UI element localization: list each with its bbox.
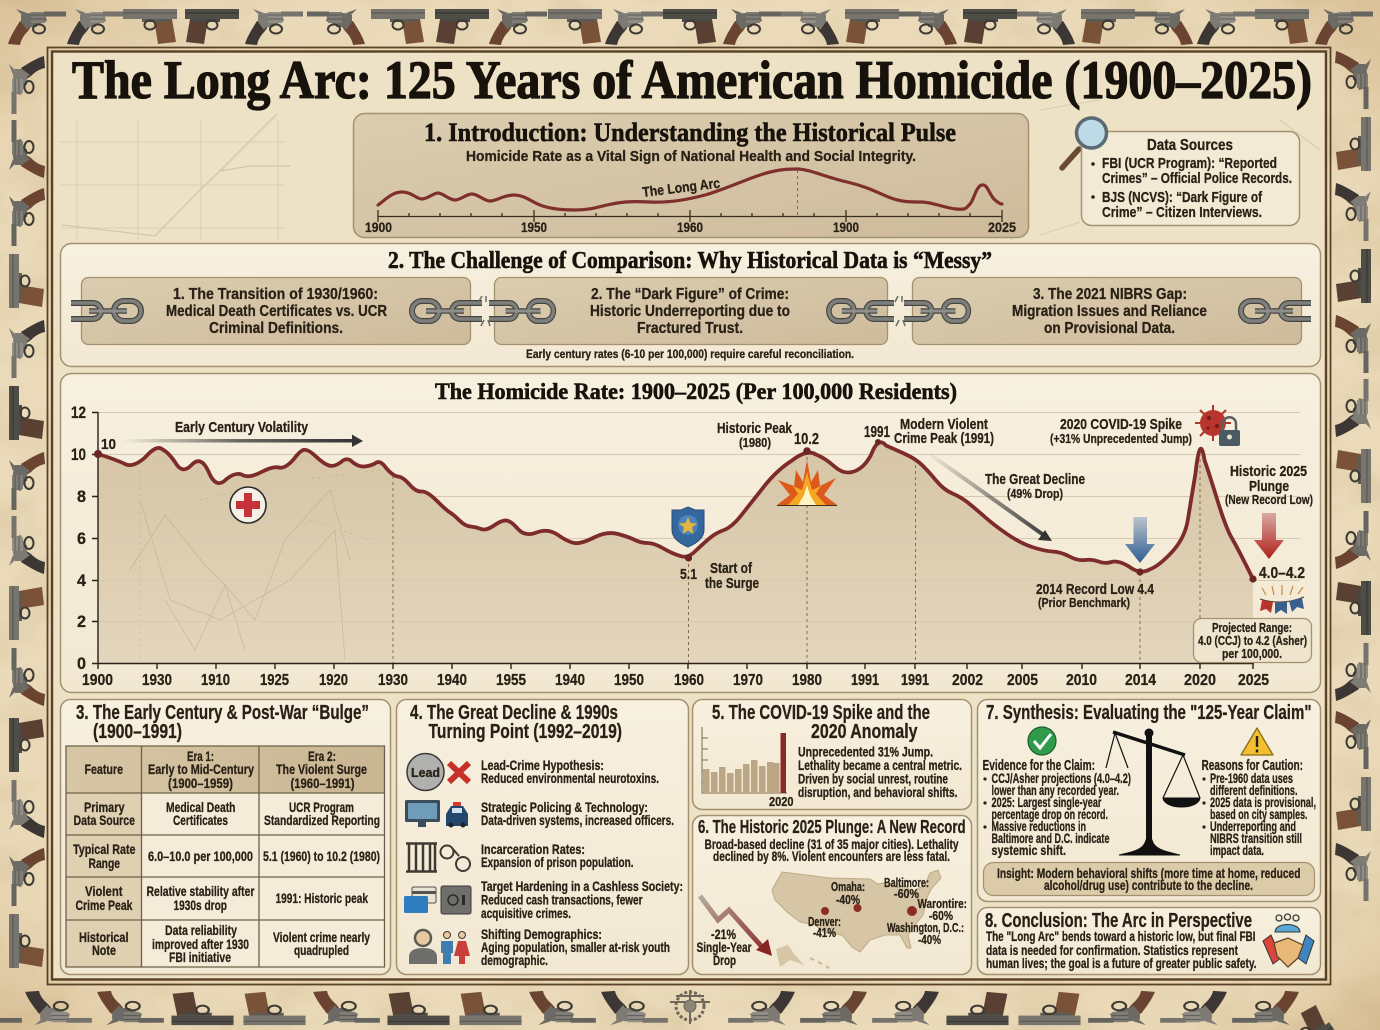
comparison table: Certificates	[173, 812, 228, 828]
callout: projected range: Projected Range:	[1212, 621, 1292, 635]
covid description: Lethality became a central metric.	[798, 757, 962, 773]
annotation: historic peak: 10.2	[794, 431, 819, 448]
covid description: disruption, and behavioral shifts.	[798, 784, 958, 800]
mini long arc chart: 1900	[365, 219, 392, 235]
comparison table: Era 1:	[187, 748, 214, 764]
chart: x-axis labels: 1910	[201, 672, 230, 689]
chart: x-axis labels: 1991	[851, 672, 879, 689]
insight callout: alcohol/drug use) contribute to the decline.	[1044, 877, 1253, 893]
chart: faint sketch texture	[130, 470, 380, 660]
chart: x-axis labels: 2005	[1007, 672, 1038, 689]
challenge footnote: Early century rates (6-10 per 100,000) require careful reconciliation.	[526, 347, 854, 361]
left gun border	[9, 56, 45, 968]
comparison table: Note	[92, 942, 116, 958]
challenge card 3: on Provisional Data.	[1044, 320, 1175, 337]
heading: section 4: 4. The Great Decline & 1990s	[410, 702, 618, 724]
chart: data point markers	[94, 439, 1257, 583]
icon: warning triangle	[1241, 728, 1273, 755]
conclusion text: human lives; the goal is a future of greater public safety.	[986, 955, 1256, 971]
mini long arc chart: The Long Arc	[641, 175, 721, 200]
comparison table: FBI initiative	[169, 949, 231, 965]
annotation: historic peak: (1980)	[739, 435, 771, 450]
faint background sketch chart	[60, 100, 1320, 240]
annotation: 2025 plunge: Plunge	[1249, 478, 1289, 495]
comparison table: UCR Program	[289, 799, 354, 815]
challenge card 2: 2. The “Dark Figure” of Crime:	[591, 286, 789, 303]
annotation: covid spike	[1050, 416, 1192, 446]
item: shifting demographics: Aging population, smaller at-risk youth	[481, 940, 670, 955]
chart: x-axis labels: 2025	[1238, 672, 1269, 689]
city labels: Omaha:	[831, 879, 865, 894]
reasons for caution: 2025 data is provisional,	[1210, 795, 1316, 810]
icon: virus and lock	[1195, 405, 1240, 446]
evidence for the claim: Evidence for the Claim:	[982, 758, 1095, 774]
challenge card 3: 3. The 2021 NIBRS Gap:	[1033, 286, 1187, 303]
item: target hardening	[481, 879, 683, 921]
plunge description: declined by 8%. Violent encounters are less fatal.	[713, 849, 950, 864]
item: strategic policing	[481, 800, 674, 828]
panel: synthesis	[978, 700, 1320, 902]
challenge card 2: Historic Underreporting due to	[590, 303, 790, 320]
challenge card 3	[912, 278, 1302, 344]
bar chart: covid spike: 2020	[769, 795, 794, 809]
annotation: 1960 low	[680, 560, 759, 592]
bottom emblem	[670, 990, 710, 1024]
chart: x-axis labels: 1930	[378, 672, 408, 689]
icon: jail and handcuffs	[406, 844, 470, 872]
panel: challenge of comparison	[60, 244, 1320, 366]
chart: x-axis labels	[82, 672, 1269, 689]
chart: x-axis labels: 2014	[1125, 672, 1156, 689]
panel: conclusion	[978, 908, 1320, 974]
comparison table: 1930s drop	[174, 897, 227, 913]
city labels: Denver:	[808, 914, 841, 929]
reasons for caution	[1202, 758, 1316, 858]
annotation: covid spike: (+31% Unprecedented Jump)	[1050, 431, 1192, 446]
reasons for caution: different definitions.	[1210, 783, 1298, 798]
chart: x-axis labels: 1980	[792, 672, 822, 689]
heading: section 5: 2020 Anomaly	[811, 721, 918, 743]
annotation: modern violent crime peak: Crime Peak (1991)	[894, 430, 994, 447]
comparison table: Data reliability	[165, 922, 237, 938]
chart: y-axis labels: 6	[77, 529, 86, 548]
annotation: early century volatility: Early Century Volatility	[175, 419, 309, 436]
annotation: covid spike: 2020 COVID-19 Spike	[1060, 416, 1182, 433]
icon: lead and red x: Lead	[411, 765, 440, 780]
heading: section 5	[712, 702, 930, 743]
callout: projected range	[1194, 618, 1312, 662]
chart: homicide rate line	[98, 442, 1253, 579]
reasons for caution: Reasons for Caution:	[1202, 758, 1303, 774]
evidence for the claim: percentage drop on record.	[992, 807, 1108, 822]
challenge card 1	[82, 278, 470, 344]
comparison table: Range	[88, 855, 120, 871]
comparison table: Early to Mid-Century	[148, 761, 254, 777]
annotation: 2025 plunge: (New Record Low)	[1225, 492, 1313, 507]
chart: axes	[92, 412, 1254, 669]
panel: early century and post-war bulge	[60, 700, 390, 974]
comparison table: Violent	[85, 883, 123, 899]
reasons for caution: NIBRS transition still	[1210, 831, 1302, 846]
chart: y-axis labels	[71, 403, 87, 673]
chart: x-axis labels: 1920	[319, 672, 348, 689]
arrow: single-year drop: -21%	[711, 926, 736, 942]
annotation: modern violent crime peak: Modern Violent	[900, 416, 988, 433]
item: incarceration: Incarceration Rates:	[481, 842, 585, 857]
comparison table: 6.0–10.0 per 100,000	[148, 848, 253, 864]
city labels: -60%	[894, 886, 919, 901]
icon: celebration banners	[1260, 585, 1304, 614]
arrow: red plunge	[1254, 513, 1284, 559]
challenge card 1: Criminal Definitions.	[209, 320, 343, 337]
covid description: Driven by social unrest, routine	[798, 770, 948, 786]
item: shifting demographics	[481, 927, 670, 968]
item: incarceration	[481, 842, 634, 870]
chart: x-axis labels: 1940	[555, 672, 585, 689]
reasons for caution: impact data.	[1210, 843, 1264, 858]
chart: y-axis labels: 10	[71, 445, 86, 464]
chart: y-axis labels: 0	[77, 654, 86, 673]
icon: police badge	[672, 507, 704, 547]
icon: lead and red x	[407, 754, 469, 790]
chart: grid lines	[98, 412, 1300, 622]
reasons for caution: Underreporting and	[1210, 819, 1296, 834]
chart: x-axis labels: 1991	[901, 672, 929, 689]
comparison table: Feature	[84, 761, 123, 777]
chart: reference dashes	[393, 447, 1200, 663]
chart: y-axis labels: 4	[77, 571, 87, 590]
icon: credit cards and safe	[404, 886, 471, 914]
data sources list: FBI (UCR Program): “Reported	[1102, 155, 1277, 172]
heading: section 4	[410, 702, 622, 743]
challenge card 1: 1. The Transition of 1930/1960:	[173, 286, 378, 303]
annotation: modern violent crime peak	[864, 416, 994, 447]
arrow: great decline: The Great Decline	[985, 471, 1085, 488]
data sources list	[1091, 155, 1292, 221]
icon: explosion	[777, 460, 837, 506]
item: target hardening: Reduced cash transactions, fewer	[481, 892, 643, 908]
comparison table: (1960–1991)	[290, 775, 354, 791]
map of united states	[772, 870, 967, 968]
comparison table: Crime Peak	[76, 897, 133, 913]
heading: section 3: (1900–1991)	[93, 721, 182, 743]
annotation: early century volatility	[122, 419, 363, 447]
comparison table: Standardized Reporting	[264, 812, 380, 828]
data sources list: BJS (NCVS): “Dark Figure of	[1102, 189, 1263, 206]
annotation: projected value: 4.0–4.2	[1259, 565, 1305, 582]
icon: magnifying glass handle	[1062, 149, 1079, 168]
bar chart: covid spike	[702, 727, 794, 809]
comparison table: Typical Rate	[73, 841, 136, 857]
mini long arc chart	[365, 169, 1016, 235]
panel: covid spike	[692, 700, 972, 810]
city labels: -41%	[813, 925, 836, 940]
evidence for the claim: Massive reductions in	[992, 819, 1086, 834]
reasons for caution: Pre-1960 data uses	[1210, 771, 1293, 786]
heading: section 3	[76, 702, 369, 743]
comparison table: 1991: Historic peak	[276, 890, 368, 906]
evidence for the claim: systemic shift.	[992, 843, 1066, 858]
heading: section 8: 8. Conclusion: The Arc in Perspective	[985, 910, 1252, 932]
chart: y-axis labels: 12	[71, 403, 86, 422]
annotation: 2014 record low	[1036, 581, 1155, 610]
annotation: 1960 low: the Surge	[705, 575, 759, 592]
annotation: historic peak: Historic Peak	[717, 420, 793, 437]
annotation: 1960 low: 5.1	[680, 566, 697, 583]
arrow: great decline: (49% Drop)	[1007, 486, 1063, 501]
chart: area	[98, 442, 1253, 663]
annotation: modern violent crime peak: 1991	[864, 424, 890, 441]
annotation: 2025 plunge	[1225, 463, 1313, 507]
comparison table: Primary	[84, 799, 125, 815]
annotation: start value: 10	[101, 436, 116, 453]
chart title: The Homicide Rate: 1900–2025 (Per 100,000 Residents)	[435, 379, 957, 404]
comparison table: The Violent Surge	[276, 761, 367, 777]
heading: challenge: 2. The Challenge of Comparison: Why Historical Data is “Messy”	[388, 248, 992, 274]
city labels	[808, 875, 967, 947]
chart: x-axis labels: 2002	[952, 672, 983, 689]
comparison table: (1900–1959)	[168, 775, 233, 791]
icon: computer and police car	[405, 800, 468, 828]
conclusion text	[986, 928, 1256, 971]
top gun border	[8, 9, 1373, 45]
comparison table: improved after 1930	[152, 936, 249, 952]
annotation: 2014 record low: 2014 Record Low 4.4	[1036, 581, 1155, 598]
evidence for the claim: CCJ/Asher projections (4.0–4.2)	[992, 771, 1131, 786]
heading: section 3: 3. The Early Century & Post-War “Bulge”	[76, 702, 369, 724]
annotation: 1960 low: Start of	[710, 560, 753, 577]
covid description	[798, 744, 962, 800]
icon: chain links	[71, 296, 1311, 326]
comparison table: Data Source	[74, 812, 135, 828]
chart: x-axis labels: 1955	[496, 672, 526, 689]
panel: introduction	[354, 114, 1028, 238]
mini long arc chart: 1960	[677, 219, 703, 235]
conclusion text: The "Long Arc" bends toward a historic low, but final FBI	[986, 928, 1256, 944]
city labels: -60%	[929, 908, 953, 923]
annotation: 2014 record low: (Prior Benchmark)	[1038, 595, 1130, 610]
item: target hardening: acquisitive crimes.	[481, 906, 571, 921]
chart: x-axis labels: 2010	[1066, 672, 1097, 689]
arrow: single-year drop	[696, 896, 772, 968]
chart: x-axis labels: 1925	[260, 672, 289, 689]
panel: 2025 plunge	[692, 816, 972, 974]
comparison table: Relative stability after	[146, 883, 255, 899]
chart: x-axis labels: 1970	[733, 672, 763, 689]
bottom gun border	[0, 991, 1335, 1030]
chart: x-axis labels: 1960	[674, 672, 704, 689]
conclusion text: data is needed for confirmation. Statistics represent	[986, 942, 1238, 958]
arrow: single-year drop: Single-Year	[696, 939, 752, 955]
challenge card 1: Medical Death Certificates vs. UCR	[166, 303, 387, 320]
city labels: Baltimore:	[884, 875, 929, 890]
challenge card 3: Migration Issues and Reliance	[1012, 303, 1207, 320]
callout: projected range: per 100,000.	[1222, 647, 1282, 661]
covid description: Unprecedented 31% Jump.	[798, 744, 933, 760]
arrow: great decline	[931, 455, 1085, 541]
icon: balance scale	[1106, 729, 1200, 855]
reasons for caution: based on city samples.	[1210, 807, 1308, 822]
challenge card 2	[494, 278, 888, 344]
item: shifting demographics: demographic.	[481, 953, 548, 968]
right gun border	[1335, 51, 1371, 901]
comparison table: quadrupled	[294, 942, 349, 958]
item: strategic policing: Strategic Policing & Technology:	[481, 800, 648, 815]
item: shifting demographics: Shifting Demographics:	[481, 927, 602, 942]
comparison table: Violent crime nearly	[273, 929, 370, 945]
chart: x-axis labels: 1900	[82, 672, 113, 689]
item: strategic policing: Data-driven systems, increased officers.	[481, 813, 674, 828]
evidence for the claim: Baltimore and D.C. indicate	[992, 831, 1110, 846]
panel: homicide rate chart	[60, 374, 1320, 692]
evidence for the claim: lower than any recorded year.	[992, 783, 1119, 798]
icon: people and handshake	[1263, 914, 1314, 967]
icon: green check	[1028, 727, 1056, 755]
insight callout	[984, 862, 1314, 896]
chart: x-axis labels: 2020	[1184, 672, 1216, 689]
chart: x-axis labels: 1930	[142, 672, 172, 689]
item: lead-crime hypothesis	[481, 758, 659, 786]
item: target hardening: Target Hardening in a Cashless Society:	[481, 879, 683, 894]
arrow: blue record low	[1125, 517, 1155, 563]
panel: great decline	[396, 700, 688, 974]
item: lead-crime hypothesis: Lead-Crime Hypothesis:	[481, 758, 604, 773]
plunge description: Broad-based decline (31 of 35 major cities). Lethality	[704, 837, 959, 852]
item: incarceration: Expansion of prison population.	[481, 855, 634, 870]
chart: x-axis labels: 1940	[437, 672, 467, 689]
subheading: Homicide Rate as a Vital Sign of National Health and Social Integrity.	[466, 148, 916, 165]
heading: section 6: 6. The Historic 2025 Plunge: A New Record	[698, 817, 966, 837]
callout: projected range: 4.0 (CCJ) to 4.2 (Asher)	[1198, 634, 1307, 648]
evidence for the claim: 2025: Largest single-year	[992, 795, 1102, 810]
annotation: historic peak	[717, 420, 819, 450]
city labels: -40%	[836, 892, 860, 907]
city labels: -40%	[918, 932, 941, 947]
heading: section 5: 5. The COVID-19 Spike and the	[712, 702, 930, 724]
chart: x-axis labels: 1950	[614, 672, 644, 689]
city labels: Washington, D.C.:	[887, 920, 964, 935]
icon: medical cross	[230, 487, 266, 523]
data sources list: Crimes” – Official Police Records.	[1102, 170, 1292, 187]
evidence for the claim	[982, 758, 1131, 858]
challenge card 2: Fractured Trust.	[637, 320, 743, 337]
comparison table: Medical Death	[166, 799, 236, 815]
chart: y-axis labels: 2	[77, 612, 86, 631]
city labels: Warontire:	[918, 896, 967, 911]
comparison table: Era 2:	[308, 748, 336, 764]
comparison table	[66, 746, 384, 967]
mini long arc chart: 1900	[833, 219, 859, 235]
data sources list: Crime” – Citizen Interviews.	[1102, 204, 1262, 221]
mini long arc chart: 2025	[988, 219, 1016, 235]
annotation: 2025 plunge: Historic 2025	[1230, 463, 1307, 480]
heading: section 4: Turning Point (1992–2019)	[428, 721, 622, 743]
comparison table: Historical	[79, 929, 128, 945]
heading: introduction: 1. Introduction: Understanding the Historical Pulse	[424, 118, 956, 147]
comparison table: 5.1 (1960) to 10.2 (1980)	[263, 848, 380, 864]
plunge description	[704, 837, 959, 864]
icon: shifting demographics people	[409, 930, 470, 964]
mini long arc chart: 1950	[521, 219, 547, 235]
arrow: single-year drop: Drop	[713, 952, 736, 968]
panel: data sources	[1076, 118, 1300, 226]
data sources heading: Data Sources	[1147, 137, 1233, 154]
chart: y-axis labels: 8	[77, 487, 86, 506]
item: lead-crime hypothesis: Reduced environmental neurotoxins.	[481, 771, 659, 786]
